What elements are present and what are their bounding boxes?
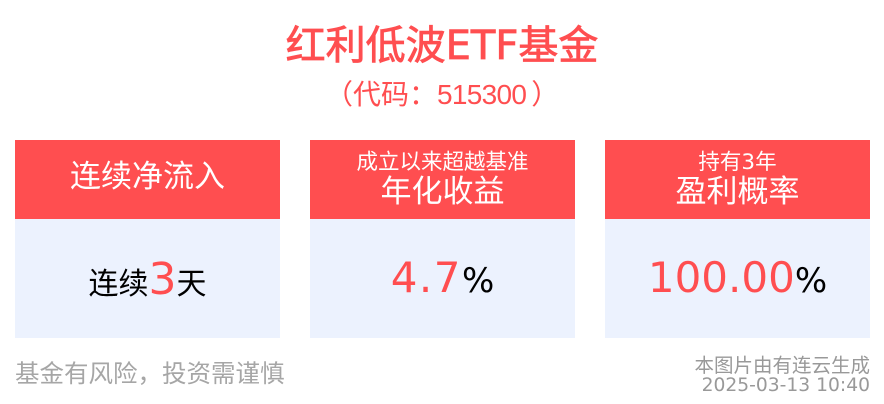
panel value: 4.7% (391, 253, 494, 302)
panel value: 100.00% (648, 253, 827, 302)
panel: excess annual return (310, 140, 575, 338)
panel header: 成立以来超越基准 (356, 150, 528, 175)
panel header (310, 140, 575, 219)
date line: 2025-03-13 10:40 (702, 375, 870, 396)
source and date (694, 354, 870, 396)
panel value: 连续3天 (88, 254, 206, 305)
panel header: 年化收益 (380, 174, 504, 210)
title: 红利低波ETF基金 (286, 23, 598, 69)
source line: 本图片由有连云生成 (694, 354, 870, 377)
panel header: 盈利概率 (676, 174, 800, 210)
panel header (605, 140, 870, 219)
panel header: 持有3年 (698, 150, 777, 175)
panel header (15, 140, 280, 219)
panel: consecutive net inflow (15, 140, 280, 338)
panel header: 连续净流入 (70, 159, 225, 195)
subtitle: fund code: （代码：515300） (325, 78, 559, 111)
risk disclaimer: 基金有风险，投资需谨慎 (15, 359, 284, 388)
panel: 3-year profit probability (605, 140, 870, 338)
